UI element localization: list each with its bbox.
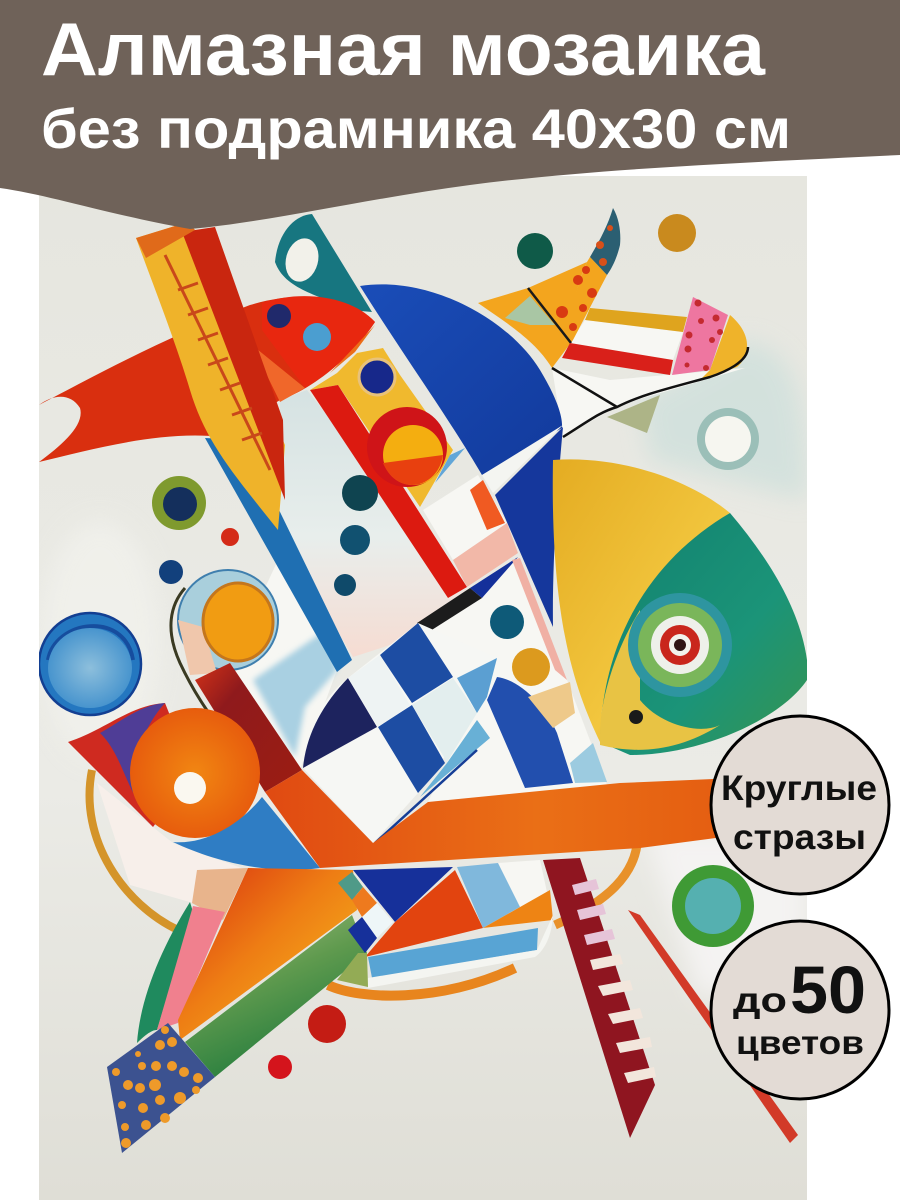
blue dome bbox=[360, 284, 562, 475]
blue arch right of kite bbox=[487, 677, 607, 788]
yellow and red crossbars bbox=[562, 308, 687, 375]
badge: up to 50 colours: до bbox=[733, 981, 787, 1020]
top teal loop bbox=[275, 214, 372, 312]
lower centre triangles bbox=[337, 863, 553, 988]
blue wedge bbox=[495, 427, 563, 627]
top right bird bbox=[478, 208, 620, 368]
green ringed dot bbox=[672, 865, 754, 947]
checkered kite bbox=[303, 623, 497, 843]
black bar and blue tip bbox=[417, 557, 518, 633]
pale wash areas bbox=[40, 340, 807, 1000]
swirl with orange ball bbox=[169, 569, 279, 710]
title: Алмазная мозаика bbox=[41, 7, 766, 91]
red fish shape bbox=[39, 296, 375, 462]
bird with orange ball bbox=[68, 703, 320, 870]
central red diagonal bbox=[310, 385, 467, 598]
pink strip bbox=[512, 558, 567, 680]
pale blue wash beside diagonal bbox=[253, 627, 337, 757]
orange long bar bbox=[265, 770, 807, 868]
badge: round rhinestones bbox=[711, 716, 889, 894]
dark red strap bbox=[195, 663, 302, 792]
top dots bbox=[517, 214, 696, 269]
white spike bbox=[482, 425, 563, 493]
striped ladder bbox=[543, 858, 656, 1138]
white backing shapes bbox=[230, 320, 745, 928]
badge: up to 50 colours: цветов bbox=[736, 1024, 864, 1061]
badge: up to 50 colours: 50 bbox=[790, 953, 866, 1028]
big blue ball bbox=[39, 613, 141, 715]
badge: round rhinestones: Круглые bbox=[721, 769, 877, 808]
red dots bottom bbox=[268, 1005, 346, 1079]
lower left wing bbox=[137, 868, 367, 1077]
right edge fish bbox=[553, 459, 807, 755]
pale ringed dot right bbox=[697, 408, 759, 470]
pink dotted tail bbox=[672, 297, 747, 380]
painting bbox=[39, 176, 807, 1200]
long blue diagonal bbox=[205, 438, 352, 672]
badge: round rhinestones: стразы bbox=[733, 818, 866, 857]
navy dot on yellow bbox=[359, 359, 395, 395]
central pale panel bbox=[280, 390, 432, 657]
salmon blocks bbox=[453, 480, 518, 587]
pale blue chip bbox=[435, 448, 465, 483]
three dark dots centre bbox=[334, 475, 378, 596]
yellow red ruler bbox=[136, 222, 285, 530]
left small dots bbox=[152, 476, 239, 584]
central yellow block bbox=[310, 348, 453, 507]
olive triangle bbox=[607, 395, 660, 433]
badge: up to 50 colours bbox=[711, 921, 889, 1099]
small dots near fish bbox=[490, 605, 550, 686]
canvas background bbox=[39, 176, 807, 1200]
subtitle: без подрамника 40х30 см bbox=[41, 97, 791, 160]
header banner bbox=[0, 0, 900, 229]
black curved lines bbox=[552, 347, 748, 437]
red ring with yellow disc bbox=[367, 407, 447, 487]
dotted patch bbox=[107, 1023, 215, 1153]
red stick bbox=[628, 910, 798, 1143]
orange back rings bbox=[89, 770, 637, 996]
